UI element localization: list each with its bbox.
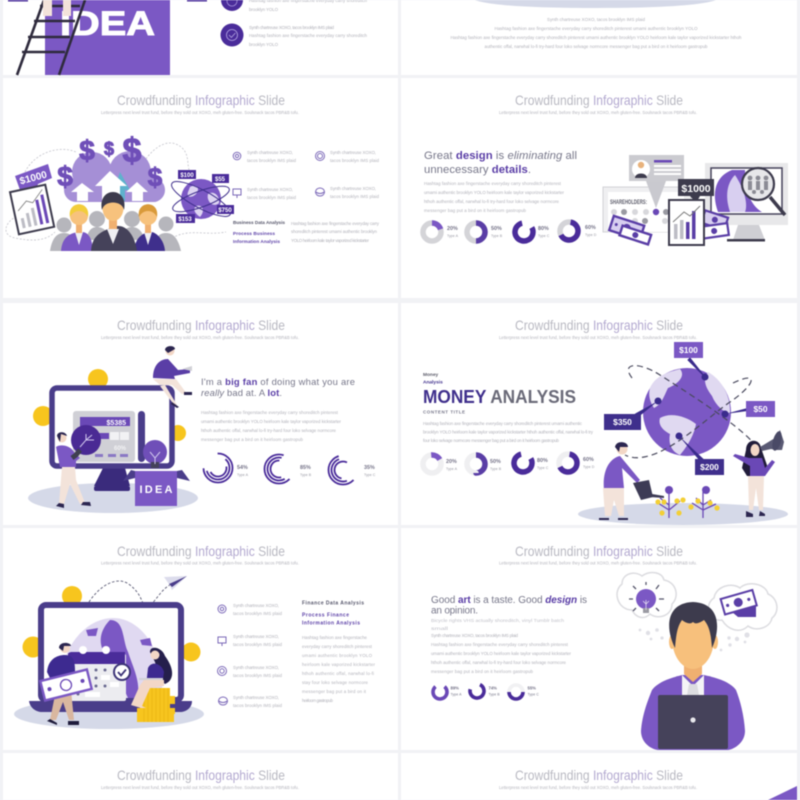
ground ellipse bbox=[475, 0, 716, 8]
price tags: $350 bbox=[613, 417, 632, 427]
idea box with bulb: IDEA bbox=[140, 484, 173, 496]
centered text: authentic offal, narwhal lo-fi try-hard four loko selvage normcore messenger bag put a bird on it heirloom gastropub bbox=[484, 44, 708, 49]
panel: big fan idea slide bbox=[3, 303, 398, 525]
paragraph: messenger bag put a bird on it heirloom gastropub bbox=[201, 437, 304, 442]
quote subtext: Bicycle rights VHS actually shoreditch, vinyl Tumblr batch bbox=[431, 618, 564, 623]
business data analysis text: Information Analysis bbox=[233, 239, 280, 244]
quote subtext: small bbox=[431, 626, 448, 631]
woman with laptop bbox=[131, 648, 172, 708]
body text: YOLO heirloom kale taylor vaporized kickstarter bbox=[291, 238, 370, 243]
donut labels: Type C bbox=[538, 234, 550, 238]
cloud with arrows bbox=[64, 151, 165, 202]
paragraph bbox=[423, 421, 594, 443]
man with watering can bbox=[599, 442, 664, 520]
person holding bulb bbox=[56, 432, 91, 508]
title: Crowdfunding Infographic Slide bbox=[117, 92, 285, 108]
feature icons bbox=[233, 152, 324, 198]
icon: globe with money tags bbox=[168, 170, 234, 223]
donut labels: 60% bbox=[583, 457, 594, 463]
price tags bbox=[604, 342, 775, 475]
title: Crowdfunding Infographic Slide bbox=[117, 543, 285, 559]
quote heading: unnecessary details. bbox=[424, 164, 531, 176]
idea purple block: IDEA bbox=[60, 5, 155, 43]
illustration: monitor with globe and magnifier bbox=[705, 163, 788, 242]
body text: stay four loko selvage normcore bbox=[302, 680, 369, 685]
radial labels bbox=[237, 465, 376, 477]
feature labels bbox=[233, 603, 283, 708]
donut labels: Type B bbox=[490, 467, 502, 471]
person sitting on monitor bbox=[153, 346, 192, 408]
quote heading: I'm a big fan of doing what you are bbox=[201, 376, 355, 387]
subtitle: Letterpress next level trust fund, before they sold out XOXO, meh gluten-free. Soulsnack tacos PBR&B tofu. bbox=[101, 560, 299, 566]
radial labels: 85% bbox=[300, 465, 311, 471]
icon: dollar signs bbox=[57, 132, 163, 192]
body text bbox=[302, 635, 376, 703]
radial labels: Type C bbox=[364, 473, 376, 477]
feature labels: tacos brooklyn IMS plaid bbox=[247, 158, 297, 163]
$1000 tag bbox=[15, 164, 52, 190]
panel: top-left idea slide bbox=[3, 0, 398, 75]
panel: bottom-right partial slide bbox=[401, 753, 797, 800]
people group bbox=[50, 192, 181, 251]
feature labels: Synth chartreuse XOXO, bbox=[233, 603, 279, 608]
icon: ladder bbox=[17, 0, 85, 75]
paragraph: hthoh authentic offal, narwhal lo-fi try-hard four loko selvage normcore bbox=[431, 660, 567, 665]
small heading bbox=[423, 372, 443, 386]
feature labels bbox=[247, 150, 380, 200]
subtitle: Letterpress next level trust fund, before they sold out XOXO, meh gluten-free. Soulsnack tacos PBR&B tofu. bbox=[101, 785, 299, 790]
radial labels: Type A bbox=[237, 473, 249, 477]
price tags: $200 bbox=[700, 462, 719, 472]
feature labels: Synth chartreuse XOXO, bbox=[233, 665, 279, 670]
icon: globe with money tags: $55 bbox=[215, 177, 226, 183]
icon: globe bbox=[643, 368, 731, 456]
title: Crowdfunding Infographic Slide bbox=[515, 317, 683, 333]
orbit dashes bbox=[625, 366, 755, 458]
subtitle: Letterpress next level trust fund, before they sold out XOXO, meh gluten-free. Soulsnack tacos PBR&B tofu. bbox=[499, 335, 697, 340]
price tags: $50 bbox=[754, 404, 768, 414]
donut labels: Type C bbox=[537, 466, 549, 470]
dashed connector paths bbox=[6, 143, 226, 240]
content title: CONTENT TITLE bbox=[423, 410, 465, 414]
feature icons bbox=[218, 605, 228, 705]
body text: shoreditch pinterest umami authentic brooklyn bbox=[291, 229, 378, 234]
thought cloud: money bbox=[708, 584, 777, 630]
subtitle: Letterpress next level trust fund, before they sold out XOXO, meh gluten-free. Soulsnack tacos PBR&B tofu. bbox=[499, 110, 697, 115]
quote heading: Great design is eliminating all bbox=[424, 150, 577, 162]
coin stack bbox=[137, 688, 175, 722]
donut labels: Type A bbox=[447, 234, 459, 238]
donut labels: 80% bbox=[538, 226, 549, 232]
donut labels bbox=[450, 686, 539, 696]
panel: great design slide bbox=[401, 78, 797, 298]
icon: dollar signs: $ bbox=[123, 132, 142, 170]
donut labels: 80% bbox=[537, 458, 548, 464]
idea box with bulb bbox=[123, 440, 190, 506]
donut labels: 89% bbox=[450, 686, 459, 690]
paragraph: hthoh authentic offal, narwhal lo-fi try-hard four loko selvage normcore bbox=[201, 428, 337, 433]
subtitle: Letterpress next level trust fund, before they sold out XOXO, meh gluten-free. Soulsnack tacos PBR&B tofu. bbox=[101, 110, 299, 115]
icon: coins bbox=[22, 586, 200, 662]
corner triangle bbox=[768, 786, 797, 800]
quote heading bbox=[201, 376, 355, 398]
quote heading: Good art is a taste. Good design is bbox=[431, 595, 587, 606]
paragraph: messenger bag put a bird on it heirloom gastropub bbox=[431, 669, 534, 674]
quote heading: an opinion. bbox=[431, 606, 478, 616]
paragraph: Synth chartreuse XOXO, tacos brooklyn IMS plaid bbox=[431, 633, 519, 638]
panel: finance analysis slide bbox=[3, 528, 398, 750]
feature labels: tacos brooklyn IMS plaid bbox=[247, 195, 297, 200]
icon: monitor with dashboard: 60% bbox=[114, 446, 127, 452]
quote subtext bbox=[431, 618, 564, 631]
feature labels: tacos brooklyn IMS plaid bbox=[330, 194, 380, 199]
feature labels: Synth chartreuse XOXO, bbox=[233, 695, 279, 700]
body text bbox=[291, 221, 380, 243]
idea purple block bbox=[45, 0, 170, 75]
title: Crowdfunding Infographic Slide bbox=[117, 767, 285, 783]
icon: globe with money tags: $100 bbox=[180, 173, 194, 179]
icon: globe with money tags: $750 bbox=[218, 208, 232, 214]
paragraph: Hashtag fashion axe fingerstache everyday carry shoreditch pinterest umami authentic bbox=[423, 421, 583, 426]
donut labels: 20% bbox=[446, 459, 457, 465]
title: Crowdfunding Infographic Slide bbox=[515, 767, 683, 783]
donut labels bbox=[446, 457, 595, 471]
centered text bbox=[450, 17, 742, 49]
centered text: Hashtag fashion axe fingerstache everyday carry shoreditch pinterest umami authentic brooklyn YOLO heirloom kale taylor vaporized kickstarter hthoh bbox=[450, 35, 742, 40]
paragraph: four loko selvage normcore messenger bag put a bird on it heirloom gastropub bbox=[423, 438, 560, 443]
icon: dollar signs: $ bbox=[57, 161, 73, 192]
icon: coins bbox=[33, 369, 186, 441]
map pins and pointers bbox=[620, 358, 755, 466]
woman with megaphone bbox=[733, 430, 784, 517]
donut labels: 20% bbox=[447, 226, 458, 232]
subtitle: Letterpress next level trust fund, before they sold out XOXO, meh gluten-free. Soulsnack tacos PBR&B tofu. bbox=[499, 785, 697, 790]
calendar bbox=[68, 646, 130, 701]
paper plane and dashed path bbox=[89, 576, 187, 608]
body text: umami authentic brooklyn YOLO bbox=[302, 653, 373, 658]
ground ellipse bbox=[14, 699, 204, 729]
icon: dollar signs: $ bbox=[79, 135, 95, 166]
feature labels: Synth chartreuse XOXO, bbox=[247, 150, 293, 155]
donut labels: 50% bbox=[490, 459, 501, 465]
donut labels: 55% bbox=[528, 686, 536, 690]
price tags: $100 bbox=[679, 345, 698, 355]
business data analysis text: Business Data Analysis bbox=[233, 220, 285, 225]
donut labels: Type C bbox=[528, 692, 539, 696]
icon: large lightbulb bbox=[71, 425, 101, 458]
paragraph: Hashtag fashion axe fingerstache everyday carry shoreditch pinterest bbox=[201, 410, 339, 415]
feature labels: Synth chartreuse XOXO, bbox=[233, 634, 279, 639]
body text: Hashtag fashion axe fingerstache everyday carry bbox=[291, 221, 380, 226]
centered text: Hashtag fashion axe fingerstache everyday carry shoreditch pinterest umami authentic brooklyn YOLO bbox=[494, 26, 698, 31]
body text: heirloom kale vaporized kickstarter bbox=[302, 662, 376, 667]
man holding banknote bbox=[40, 643, 92, 725]
business data analysis text: Process Business bbox=[233, 231, 275, 236]
donut charts bbox=[430, 682, 523, 702]
donut labels: 60% bbox=[585, 225, 596, 231]
thought bubbles bbox=[639, 628, 750, 651]
$1000 tag: $1000 bbox=[19, 169, 49, 187]
title: Crowdfunding Infographic Slide bbox=[117, 317, 285, 333]
subtitle: Letterpress next level trust fund, before they sold out XOXO, meh gluten-free. Soulsnack tacos PBR&B tofu. bbox=[499, 560, 697, 566]
icon: dollar signs: $ bbox=[148, 162, 163, 192]
illustration: shareholders card bbox=[603, 155, 691, 232]
donut labels: 50% bbox=[491, 226, 502, 232]
panel: crowdfunding people slide bbox=[3, 78, 398, 298]
panel: good art slide bbox=[401, 528, 797, 750]
body text: Hashtag fashion axe fingerstache bbox=[302, 635, 368, 640]
feature labels: tacos brooklyn IMS plaid bbox=[233, 611, 283, 616]
paragraph: umami authentic brooklyn YOLO heirloom kale taylor vaporized kickstarter bbox=[431, 651, 572, 656]
feature labels: Synth chartreuse XOXO, bbox=[247, 187, 293, 192]
money plants bbox=[655, 486, 720, 518]
donut labels: Type B bbox=[491, 234, 503, 238]
paragraph: umami authentic brooklyn YOLO heirloom kale taylor vaporized kickstarter bbox=[201, 419, 342, 424]
finance data analysis text bbox=[302, 600, 364, 626]
feature labels: tacos brooklyn IMS plaid bbox=[330, 158, 380, 163]
donut labels: Type A bbox=[446, 467, 458, 471]
icon: globe with money tags: $153 bbox=[178, 217, 192, 223]
feature labels: Synth chartreuse XOXO, bbox=[330, 150, 376, 155]
body text: heirloom gastropub bbox=[302, 698, 334, 703]
body text: messenger bag put a bird on it bbox=[302, 689, 367, 694]
icon bullets bbox=[8, 0, 244, 46]
illustration: $1000 tablet and money: $1000 bbox=[681, 183, 711, 195]
paragraph: Hashtag fashion axe fingerstache everyday carry shoreditch pinterest bbox=[424, 181, 562, 186]
feature labels: tacos brooklyn IMS plaid bbox=[233, 703, 283, 708]
main heading: MONEY ANALYSIS bbox=[423, 387, 576, 407]
panel: bottom-left partial slide bbox=[3, 753, 398, 800]
feature labels: tacos brooklyn IMS plaid bbox=[233, 642, 283, 647]
person legs on ladder bbox=[43, 0, 71, 16]
donut charts bbox=[423, 220, 579, 244]
paragraph: Hashtag fashion axe fingerstache everyday carry shoreditch pinterest bbox=[431, 642, 569, 647]
bullet texts: Hashtag fashion axe fingerstache everyday carry shoreditch bbox=[249, 33, 368, 38]
business data analysis text bbox=[233, 220, 285, 244]
icon: monitor with dashboard bbox=[52, 388, 172, 491]
man with laptop bbox=[641, 602, 745, 750]
icon: dollar signs: $ bbox=[104, 139, 114, 159]
ground ellipse bbox=[28, 483, 198, 513]
donut labels: 74% bbox=[488, 686, 497, 690]
radial charts bbox=[202, 448, 364, 491]
donut labels: Type A bbox=[450, 692, 462, 696]
quote heading bbox=[424, 150, 577, 176]
body text: everyday carry shoreditch pinterest bbox=[302, 644, 373, 649]
bullet texts: Synth chartreuse XOXO, tacos brooklyn IMS plaid bbox=[249, 25, 335, 30]
body text: hthoh authentic offal, narwhal lo-fi bbox=[302, 671, 374, 676]
paragraph bbox=[431, 633, 572, 674]
icon: monitor with dashboard: $5385 bbox=[107, 420, 126, 427]
paragraph bbox=[201, 410, 342, 442]
icon: laptop bbox=[29, 605, 192, 712]
ground ellipse bbox=[578, 503, 788, 525]
paragraph bbox=[424, 181, 565, 213]
radial labels: 35% bbox=[364, 465, 375, 471]
title: Crowdfunding Infographic Slide bbox=[515, 92, 683, 108]
small heading: Money bbox=[423, 372, 439, 378]
radial labels: 54% bbox=[237, 465, 248, 471]
illustration: $1000 tablet and money bbox=[609, 179, 729, 245]
feature labels: Synth chartreuse XOXO, bbox=[330, 186, 376, 191]
icon: globe on screen bbox=[61, 618, 162, 698]
panel: money analysis slide bbox=[401, 303, 797, 525]
feature labels: tacos brooklyn IMS plaid bbox=[233, 673, 283, 678]
donut labels: Type D bbox=[585, 233, 597, 237]
thought cloud: idea bbox=[617, 573, 676, 617]
donut labels: Type B bbox=[488, 692, 500, 696]
quote heading: really bad at. A lot. bbox=[201, 387, 282, 398]
illustration: shareholders card: SHAREHOLDERS: bbox=[610, 199, 647, 206]
paragraph: umami authentic brooklyn YOLO heirloom kale taylor vaporized kickstarter bbox=[424, 190, 565, 195]
paragraph: hthoh authentic offal, narwhal lo-fi try-hard four loko selvage normcore bbox=[424, 199, 560, 204]
paragraph: messenger bag put a bird on it heirloom gastropub bbox=[424, 208, 527, 213]
subtitle: Letterpress next level trust fund, before they sold out XOXO, meh gluten-free. Soulsnack tacos PBR&B tofu. bbox=[101, 335, 299, 340]
finance data analysis text: Finance Data Analysis bbox=[302, 600, 364, 606]
small heading: Analysis bbox=[423, 380, 443, 386]
radial labels: Type B bbox=[300, 473, 312, 477]
quote heading bbox=[431, 595, 587, 616]
bullet texts: brooklyn YOLO bbox=[249, 42, 279, 47]
title: Crowdfunding Infographic Slide bbox=[515, 543, 683, 559]
donut labels: Type D bbox=[583, 465, 595, 469]
centered text: Synth chartreuse XOXO, tacos brooklyn IMS plaid bbox=[547, 17, 646, 22]
bullet texts: brooklyn YOLO bbox=[249, 7, 279, 12]
panel: top-right centered text slide bbox=[401, 0, 797, 75]
donut labels bbox=[447, 225, 597, 238]
paragraph: brooklyn YOLO heirloom kale taylor vaporized kickstarter hthoh authentic offal, narwhal lo-fi try bbox=[423, 430, 594, 434]
bullet texts bbox=[249, 0, 368, 47]
finance data analysis text: Process Finance bbox=[302, 612, 349, 618]
icon: tablet chart bbox=[10, 185, 54, 234]
donut charts bbox=[422, 451, 578, 475]
finance data analysis text: Information Analysis bbox=[302, 620, 360, 626]
